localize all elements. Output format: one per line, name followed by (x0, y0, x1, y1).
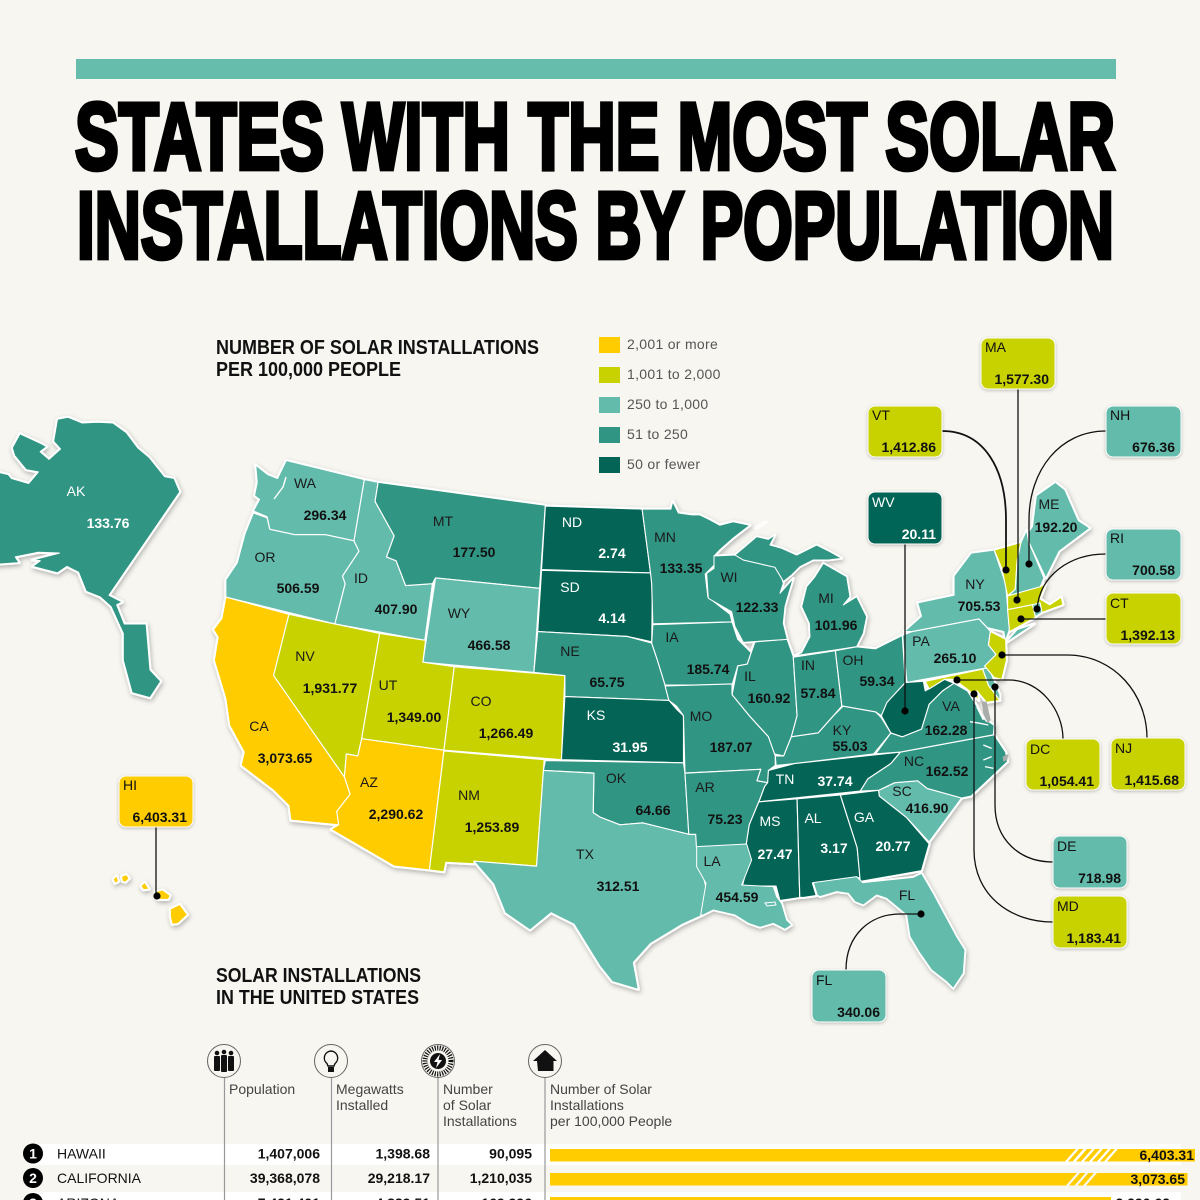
state labels: 37.74 (817, 773, 853, 789)
callout: CT: 1,392.13 (1120, 627, 1175, 643)
state: CO (444, 667, 565, 760)
callout: MD: 1,183.41 (1066, 930, 1121, 946)
table heading (216, 965, 421, 1009)
state: VA (876, 683, 994, 754)
callout: RI (1106, 529, 1181, 580)
column headers: per 100,000 People (550, 1113, 672, 1129)
column headers (229, 1081, 672, 1129)
callout: WV: 20.11 (902, 526, 936, 542)
state labels: AR (695, 779, 715, 795)
state labels: IL (744, 668, 756, 684)
state: FL (813, 873, 965, 988)
row 2: California (23, 1168, 1188, 1188)
state labels: MO (690, 708, 712, 724)
state labels: CA (249, 718, 269, 734)
state: WI (707, 555, 793, 642)
callout: WV: WV (872, 494, 895, 510)
state labels: 2,290.62 (369, 806, 423, 822)
connector lines (153, 389, 1147, 970)
callout: FL: 340.06 (837, 1004, 880, 1020)
row 2: California: 3,073.65 (1130, 1171, 1185, 1187)
state: WA (253, 460, 364, 541)
column headers: Population (229, 1081, 295, 1097)
state labels: 192.20 (1035, 519, 1078, 535)
state: DE (983, 667, 1000, 700)
state labels: PA (912, 633, 930, 649)
callout: FL (812, 970, 886, 1022)
state labels: OK (606, 770, 627, 786)
state: KS (561, 697, 684, 763)
state labels: 57.84 (800, 685, 836, 701)
state labels: 20.77 (875, 838, 911, 854)
callout: DC: DC (1030, 741, 1050, 757)
callout: DE: 718.98 (1078, 870, 1121, 886)
state: MI lower peninsula (795, 563, 867, 656)
state: NV (274, 614, 380, 777)
state: NY (904, 550, 1034, 645)
map outer outline and shadow (0, 417, 1090, 989)
legend: 50 or fewer (627, 456, 700, 472)
legend: 1,001 to 2,000 (627, 366, 721, 382)
state: NJ (985, 632, 1006, 679)
state: RI (1032, 603, 1042, 617)
state labels: AL (804, 810, 822, 826)
callout: HI: 6,403.31 (132, 809, 187, 825)
top accent bar (76, 59, 1116, 79)
callout: MD: MD (1057, 898, 1079, 914)
legend: 2,001 or more (627, 336, 718, 352)
callout: DE (1053, 836, 1127, 888)
state labels: 1,253.89 (465, 819, 519, 835)
callout: HI: HI (123, 777, 137, 793)
column headers: of Solar (443, 1097, 492, 1113)
state labels: MN (654, 529, 676, 545)
callout: RI: 700.58 (1132, 562, 1175, 578)
map heading (216, 337, 539, 381)
state labels: 101.96 (815, 617, 858, 633)
state labels: OH (842, 652, 864, 668)
state labels: 3.17 (820, 840, 848, 856)
state: OH (835, 635, 905, 716)
state labels: IA (665, 629, 679, 645)
state: MD (925, 669, 1000, 702)
state labels: NY (965, 576, 985, 592)
state labels: IN (801, 657, 815, 673)
state labels: 1,931.77 (303, 680, 357, 696)
state labels: WY (448, 605, 471, 621)
state: NM (429, 751, 544, 872)
state: IL (732, 639, 797, 756)
state: IA (652, 622, 751, 685)
state labels: 185.74 (687, 661, 730, 677)
map of US states (0, 417, 1090, 989)
state: ME (1029, 482, 1090, 578)
state labels: 705.53 (958, 598, 1001, 614)
state labels: 133.76 (87, 515, 130, 531)
icon: people (208, 1044, 240, 1078)
legend: 51 to 250 (627, 426, 688, 442)
state: WY (423, 578, 540, 672)
state: TN (759, 752, 900, 802)
state labels: 416.90 (906, 800, 949, 816)
state: LA (697, 844, 792, 929)
state labels: 312.51 (597, 878, 640, 894)
callout: RI: RI (1110, 530, 1124, 546)
state labels: 75.23 (707, 811, 743, 827)
state labels: 2.74 (598, 545, 626, 561)
callout: MA: 1,577.30 (994, 371, 1049, 387)
map heading: NUMBER OF SOLAR INSTALLATIONS (216, 337, 539, 359)
state: CT (1008, 605, 1036, 632)
state labels: 1,349.00 (387, 709, 441, 725)
row 3: Arizona (23, 1193, 1170, 1200)
column headers: Number of Solar (550, 1081, 652, 1097)
state: VT (994, 542, 1021, 596)
column rules (224, 1078, 545, 1200)
row 2: California: CALIFORNIA (57, 1170, 142, 1186)
callout: HI (119, 776, 193, 827)
row 1: Hawaii: HAWAII (57, 1146, 106, 1162)
state: ID (335, 480, 432, 640)
state labels: 177.50 (453, 544, 496, 560)
state labels: 160.92 (748, 690, 791, 706)
state labels: WI (720, 569, 738, 585)
column headers: Installed (336, 1097, 388, 1113)
callout: NJ (1111, 738, 1185, 790)
state labels: 27.47 (757, 846, 793, 862)
callout: DE: DE (1057, 838, 1076, 854)
state labels: ME (1038, 496, 1060, 512)
state: AZ (331, 739, 444, 870)
callout: MA: MA (985, 339, 1007, 355)
state labels: OR (254, 549, 276, 565)
state labels: 3,073.65 (258, 750, 312, 766)
map heading: PER 100,000 PEOPLE (216, 359, 401, 381)
state labels: NE (560, 643, 580, 659)
callout: NJ: 1,415.68 (1124, 772, 1179, 788)
state labels: AK (67, 483, 86, 499)
legend (599, 336, 721, 473)
state: UT (362, 633, 454, 750)
title (75, 84, 1115, 279)
state: AK (0, 417, 180, 698)
callout: WV (868, 492, 942, 544)
row 1: Hawaii: 1,407,006 (258, 1146, 320, 1162)
state labels: ID (354, 570, 368, 586)
state labels: 55.03 (832, 738, 868, 754)
row 2: California: 1,210,035 (470, 1170, 532, 1186)
state labels: 122.33 (736, 599, 779, 615)
state labels: 4.14 (598, 610, 626, 626)
callout: FL: FL (816, 972, 833, 988)
column headers: Megawatts (336, 1081, 404, 1097)
icon: light bulb (314, 1044, 348, 1078)
state: MN (642, 501, 750, 624)
callout: VT: VT (872, 407, 890, 423)
state labels: 64.66 (635, 802, 671, 818)
row 2: California: 29,218.17 (368, 1170, 430, 1186)
state labels: TX (576, 846, 595, 862)
row 1: Hawaii: 6,403.31 (1140, 1147, 1194, 1163)
state: TX (474, 770, 706, 989)
icon: sun with bolt (422, 1044, 454, 1078)
state labels: 162.52 (926, 763, 969, 779)
callout: DC: 1,054.41 (1040, 773, 1094, 789)
state: MA (1008, 584, 1063, 612)
state: WV (881, 679, 954, 737)
state: KY (775, 706, 891, 765)
state labels: NM (458, 787, 480, 803)
state labels: KS (587, 707, 605, 723)
callout: VT: 1,412.86 (882, 439, 936, 455)
row 1: Hawaii: 1,398.68 (376, 1146, 430, 1162)
state: PA (902, 619, 996, 682)
state labels: MS (760, 813, 780, 829)
state: MI upper peninsula (735, 535, 842, 582)
callout: MA (981, 338, 1055, 389)
state labels: KY (833, 722, 852, 738)
state: IN (791, 651, 842, 737)
state labels: MI (818, 590, 834, 606)
icon: house (528, 1044, 562, 1078)
state: SC (879, 781, 962, 842)
state: CA (214, 597, 350, 825)
state labels: UT (379, 677, 398, 693)
callout: CT: CT (1110, 595, 1129, 611)
callout: NH: NH (1110, 407, 1130, 423)
column headers: Installations (443, 1113, 517, 1129)
callout: MD (1053, 896, 1127, 948)
state: MT (375, 482, 545, 588)
state labels: 407.90 (375, 601, 418, 617)
table heading: IN THE UNITED STATES (216, 987, 419, 1009)
state labels: 506.59 (277, 580, 320, 596)
row 1: Hawaii (23, 1144, 1195, 1164)
state labels: VA (942, 698, 960, 714)
state: HI (113, 875, 188, 924)
state labels: SC (892, 783, 912, 799)
state labels: ND (562, 514, 582, 530)
callout: NH (1106, 406, 1181, 457)
row 2: California: 39,368,078 (250, 1170, 320, 1186)
state labels: NC (904, 753, 924, 769)
state: ND (542, 506, 651, 573)
state labels (67, 475, 1078, 905)
state labels: AZ (360, 774, 378, 790)
table heading: SOLAR INSTALLATIONS (216, 965, 421, 987)
state labels: 454.59 (716, 889, 759, 905)
callout: VT (868, 406, 942, 457)
state labels: FL (899, 887, 915, 903)
column headers: Installations (550, 1097, 624, 1113)
state labels: 65.75 (589, 674, 625, 690)
state: OR (226, 513, 359, 624)
state labels: WA (294, 475, 317, 491)
state labels: 133.35 (660, 560, 703, 576)
state: GA (840, 790, 929, 881)
state labels: NV (295, 648, 315, 664)
state: AL (797, 795, 860, 898)
state labels: 162.28 (925, 722, 968, 738)
state labels: CO (470, 693, 492, 709)
callout: CT (1106, 593, 1181, 644)
state labels: 187.07 (710, 739, 753, 755)
coastal details: Puget Sound, Isle Royale, Lake Pontchartrain (274, 477, 776, 906)
state labels: 31.95 (612, 739, 648, 755)
state labels: 466.58 (468, 637, 511, 653)
state labels: 59.34 (859, 673, 895, 689)
row 1: Hawaii: 90,095 (489, 1146, 532, 1162)
state labels: 296.34 (304, 507, 347, 523)
state: NC (860, 735, 1008, 798)
state labels: LA (703, 853, 721, 869)
callout: NJ: NJ (1115, 740, 1132, 756)
state: AR (685, 769, 768, 847)
state labels: MT (433, 513, 454, 529)
row 2: California: 2 (29, 1170, 37, 1186)
state: MS (742, 799, 800, 901)
state labels: SD (560, 579, 580, 595)
state labels: GA (854, 809, 875, 825)
state: NE (534, 632, 669, 700)
table row bands (30, 1144, 1181, 1200)
state: NH (1008, 530, 1044, 596)
state labels: 1,266.49 (479, 725, 533, 741)
callout: DC (1026, 739, 1100, 790)
callout: NH: 676.36 (1132, 439, 1175, 455)
state: OK (543, 761, 689, 834)
column headers: Number (443, 1081, 493, 1097)
state labels: TN (776, 771, 794, 787)
state labels: 265.10 (934, 650, 977, 666)
state: SD (538, 570, 653, 642)
state: MO (665, 684, 775, 783)
row 1: Hawaii: 1 (29, 1146, 37, 1162)
legend: 250 to 1,000 (627, 396, 708, 412)
Chesapeake Bay and Pamlico Sound (970, 697, 1008, 768)
